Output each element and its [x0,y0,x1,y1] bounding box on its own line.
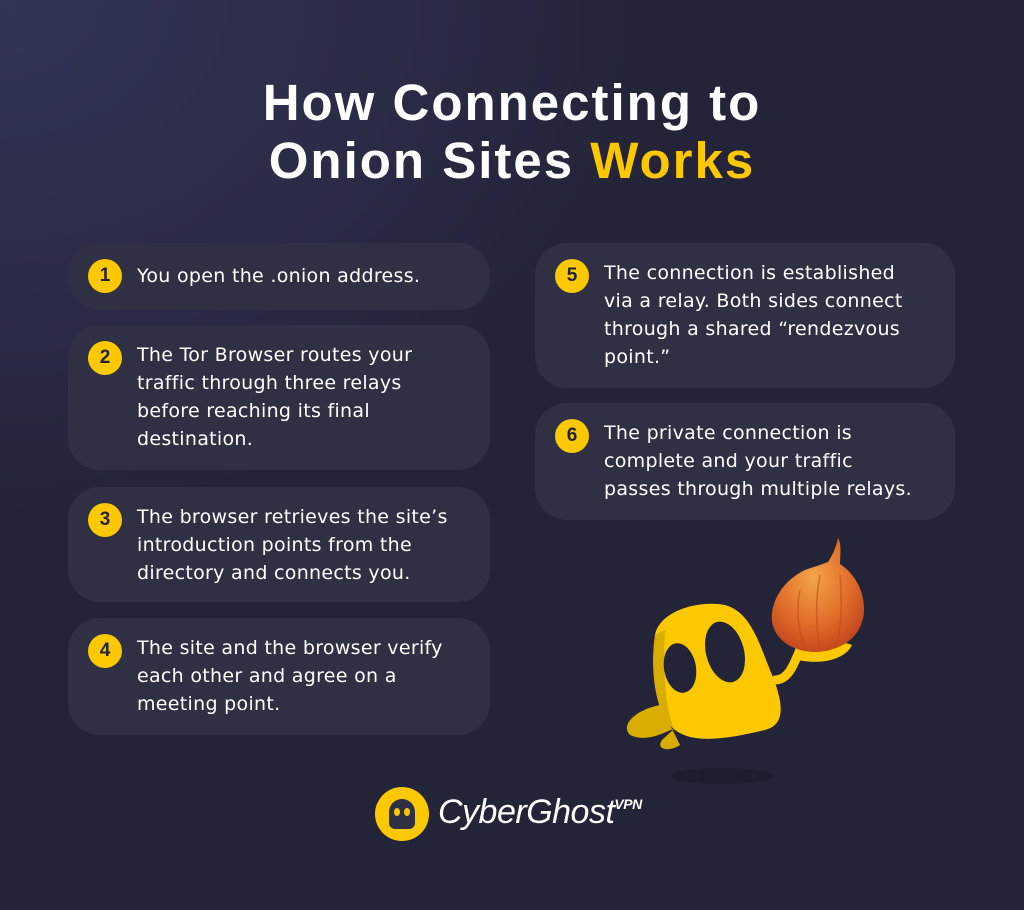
card 6: complete and your traffic [604,450,853,472]
card 2: destination. [137,428,253,450]
illustration: ghost holding onion [626,538,864,784]
card 6: passes through multiple relays. [604,478,912,500]
card 3: directory and connects you. [137,562,411,584]
card 1: 1 [100,265,110,286]
title: How Connecting to [263,74,761,131]
card 4: 4 [100,640,110,661]
title: Onion Sites Works [269,132,755,189]
card 4: The site and the browser verify [137,637,443,659]
card 6 [535,403,955,520]
card 4: each other and agree on a [137,665,397,687]
card 2: 2 [100,347,110,368]
card 5: point.” [604,346,670,368]
card 3: 3 [100,509,110,530]
card 2: before reaching its final [137,400,370,422]
card 5: 5 [567,265,577,286]
card 6: The private connection is [604,422,852,444]
logo [375,787,642,841]
card 3 [68,487,490,602]
card 6: 6 [567,425,577,446]
icon: ghost logo [375,787,429,841]
wordmark: CyberGhostVPN [438,793,642,831]
card 5 [535,243,955,388]
card 4: meeting point. [137,693,280,715]
card 5: The connection is established [604,262,895,284]
card 3: introduction points from the [137,534,412,556]
card 2: traffic through three relays [137,372,402,394]
card 5: through a shared “rendezvous [604,318,900,340]
card 4 [68,618,490,735]
card 2 [68,325,490,470]
card 1: You open the .onion address. [137,265,420,287]
card 5: via a relay. Both sides connect [604,290,903,312]
card 3: The browser retrieves the site’s [137,506,448,528]
card 2: The Tor Browser routes your [137,344,412,366]
card 1 [68,243,490,310]
title [263,74,761,189]
